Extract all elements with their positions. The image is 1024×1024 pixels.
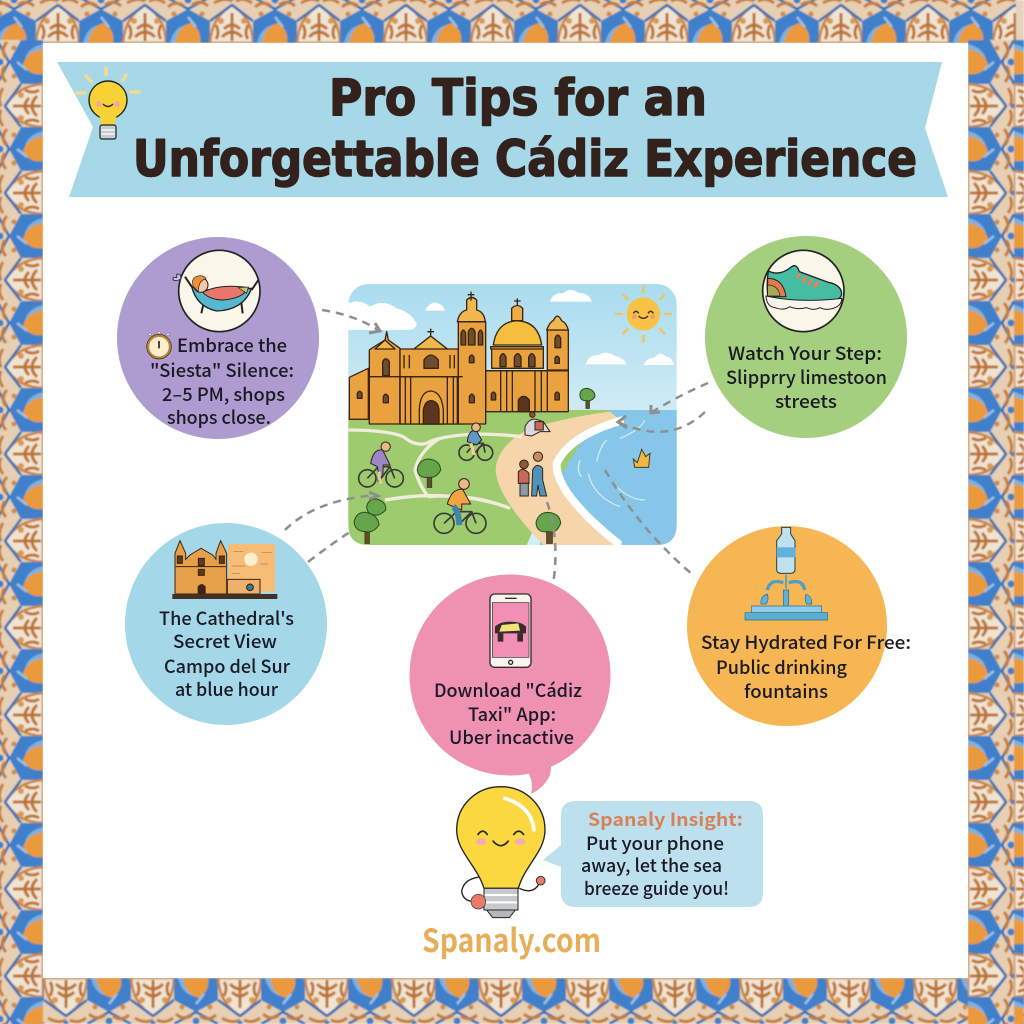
icon: bottle and fountain (745, 527, 828, 620)
cathedral (349, 292, 568, 424)
text: hydration: fountains (744, 678, 828, 704)
text: cathedral view: The Cathedral's (159, 605, 294, 631)
text: siesta: "Siesta" Silence: (150, 357, 294, 383)
icon: light bulb (77, 68, 139, 139)
callout: spanaly insight (543, 801, 763, 907)
text: taxi app (434, 677, 582, 750)
panel: cathedral view (125, 523, 327, 725)
title text: Unforgettable Cádiz Experience (133, 130, 917, 188)
trees (354, 388, 595, 543)
panel: siesta (117, 237, 319, 439)
title banner (57, 62, 948, 197)
central illustration (348, 284, 677, 545)
text: hydration (701, 629, 911, 704)
title text: Pro Tips for an (329, 69, 707, 127)
text: watch your step: Slipprry limestoon (726, 364, 887, 390)
title text (133, 69, 917, 188)
panel: hydration (687, 526, 911, 726)
icon: hammock (173, 250, 260, 332)
brand: Spanaly.com: Spanaly.com (422, 916, 601, 962)
text: cathedral view: Campo del Sur (164, 653, 291, 679)
text: cathedral view: Secret View (173, 628, 277, 654)
callout text: breeze guide you! (584, 875, 729, 901)
sea (540, 410, 677, 545)
callout text (581, 830, 729, 901)
cyclists (359, 423, 493, 533)
text: watch your step: streets (775, 388, 837, 414)
sand (496, 412, 623, 545)
text: siesta: Embrace the (177, 332, 287, 358)
text: cathedral view: at blue hour (175, 676, 279, 702)
text: hydration: Public drinking (716, 654, 848, 680)
icon: phone (490, 594, 531, 667)
text: siesta (150, 332, 294, 430)
text: siesta: shops close. (167, 404, 271, 430)
icon: shoe (763, 250, 844, 332)
callout text: away, let the sea (581, 852, 722, 878)
grass (348, 410, 610, 545)
callout text: Put your phone (586, 830, 724, 856)
boat (633, 449, 650, 467)
panel: watch your step (705, 236, 907, 438)
text: taxi app: Download "Cádiz (434, 677, 582, 703)
text: taxi app: Uber incactive (449, 724, 574, 750)
text: watch your step (726, 340, 887, 414)
arrowheads (369, 323, 660, 499)
paths (348, 430, 522, 508)
dashed arrows (285, 310, 708, 584)
text: watch your step: Watch Your Step: (728, 340, 882, 366)
panel: taxi app (410, 574, 610, 794)
mascot: light bulb (457, 787, 545, 918)
sun (615, 286, 672, 343)
text: cathedral view (159, 605, 294, 702)
icon: stopwatch (147, 331, 171, 359)
sky (348, 284, 677, 545)
icon: cathedral and sunset (172, 541, 277, 599)
people (518, 412, 550, 496)
text: taxi app: Taxi" App: (468, 701, 556, 727)
text: siesta: 2–5 PM, shops (162, 381, 285, 407)
callout heading: Spanaly Insight: (588, 806, 743, 832)
clouds (348, 290, 674, 365)
text: hydration: Stay Hydrated For Free: (701, 629, 911, 655)
